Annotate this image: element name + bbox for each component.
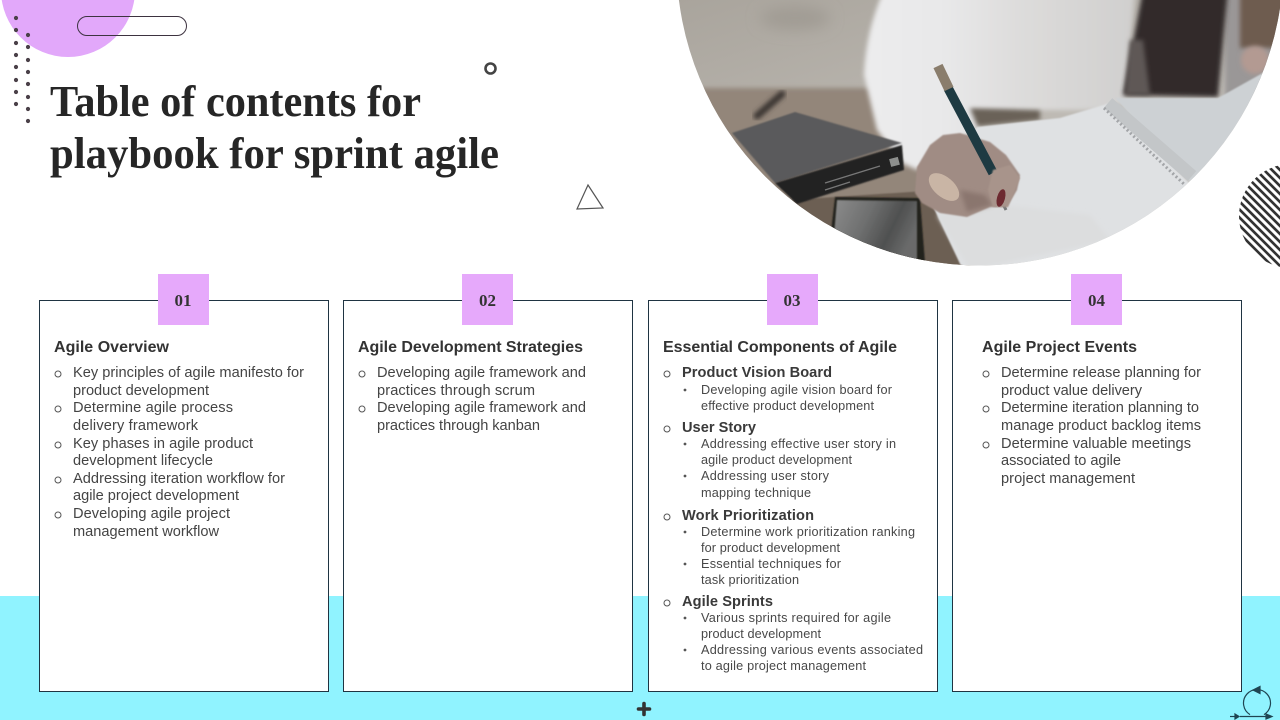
number badge 04 [1071,274,1122,325]
decorative pill outline [78,16,186,36]
section: User Story: agile product development [701,453,852,467]
icon: cycle with arrows [1230,686,1272,719]
number badge 02 [462,274,513,325]
list: agile overview items: product development [73,383,209,399]
notebook [1119,72,1262,182]
pink corner circle [1,0,135,57]
section: Product Vision Board: effective product development [701,399,874,413]
list: project events items: project management [1001,471,1135,487]
blurred smudge [768,8,824,29]
dark blurred object [757,94,782,116]
list: development strategies items: practices through kanban [377,418,540,434]
number badge 03 [767,274,818,325]
list: project events items: Determine valuable meetings [1001,436,1191,452]
list: agile overview items: delivery framework [73,418,199,434]
number badge 01 [158,274,209,325]
list: agile overview items: Determine agile process [73,400,233,416]
section: Agile Sprints: product development [701,627,821,641]
finger and red nail [988,165,1020,207]
section: Work Prioritization: Essential techniques for [701,557,842,571]
section: Work Prioritization: task prioritization [701,573,799,587]
section: Product Vision Board: Product Vision Board [682,365,832,381]
list: agile overview items [55,365,304,540]
section: Agile Sprints: to agile project management [701,659,866,673]
number badge 02: 02 [479,291,496,310]
section: Work Prioritization: for product development [701,541,840,555]
section: User Story: Addressing user story [701,469,830,483]
list: agile overview items: Addressing iteration workflow for [73,471,285,487]
ring [928,173,960,201]
list: project events items: Determine iteration planning to [1001,400,1199,416]
section: Agile Sprints: Various sprints required for agile [701,611,891,625]
number badge 03: 03 [784,291,800,310]
dotted columns [14,16,30,123]
list: project events items: manage product backlog items [1001,418,1201,434]
heading: Agile Development Strategies: Agile Development Strategies [358,339,583,356]
heading: Agile Project Events: Agile Project Events [982,339,1137,356]
section: Product Vision Board [664,365,893,413]
list: development strategies items: practices through scrum [377,383,535,399]
section: Work Prioritization: Determine work prioritization ranking [701,525,915,539]
list: agile overview items: Developing agile project [73,506,230,522]
book [732,112,902,183]
heading: Essential Components of Agile: Essential Components of Agile [663,339,897,356]
section: Work Prioritization: Work Prioritization [682,508,814,524]
section: User Story [664,420,896,500]
striped circle [1239,166,1280,267]
title: playbook for sprint agile [50,129,499,178]
section: Work Prioritization [664,508,915,587]
title [50,77,499,178]
list: project events items: Determine release planning for [1001,365,1201,381]
icon: plus sign [638,704,650,714]
section: Agile Sprints: Agile Sprints [682,594,773,610]
list: agile overview items: agile project development [73,488,239,504]
panel 2: Agile Development Strategies [344,274,632,692]
sweater [864,0,1135,170]
phone [830,196,926,260]
section: User Story: User Story [682,420,757,436]
number badge 01: 01 [174,291,192,310]
pen [938,66,1006,210]
panel 1: Agile Overview [40,274,328,692]
section: Agile Sprints: Addressing various events associated [701,643,923,657]
triangle outline [577,185,603,209]
panel 4: Agile Project Events [952,274,1242,692]
right background [1225,0,1280,100]
cyan bottom band [0,596,1280,720]
list: agile overview items: development lifecycle [73,453,213,469]
section: Agile Sprints [664,594,923,673]
number badge 04: 04 [1088,291,1106,310]
hand [915,133,1020,217]
list: development strategies items: Developing agile framework and [377,400,586,416]
photo: hand writing in a notebook [670,0,1280,290]
hair [1123,0,1228,97]
section: User Story: mapping technique [701,486,811,500]
list: project events items [983,365,1201,487]
list: agile overview items: management workflow [73,524,219,540]
section: Product Vision Board: Developing agile vision board for [701,383,893,397]
section: User Story: Addressing effective user story in [701,437,896,451]
title: Table of contents for [50,77,421,126]
panel 3: Essential Components of Agile [648,274,938,692]
list: project events items: associated to agile [1001,453,1121,469]
list: agile overview items: Key principles of agile manifesto for [73,365,304,381]
table [703,86,988,266]
list: development strategies items [359,365,586,434]
list: development strategies items: Developing agile framework and [377,365,586,381]
heading: Agile Overview: Agile Overview [54,339,170,356]
list: agile overview items: Key phases in agile product [73,436,253,452]
small ring [486,64,496,74]
list: project events items: product value delivery [1001,383,1143,399]
